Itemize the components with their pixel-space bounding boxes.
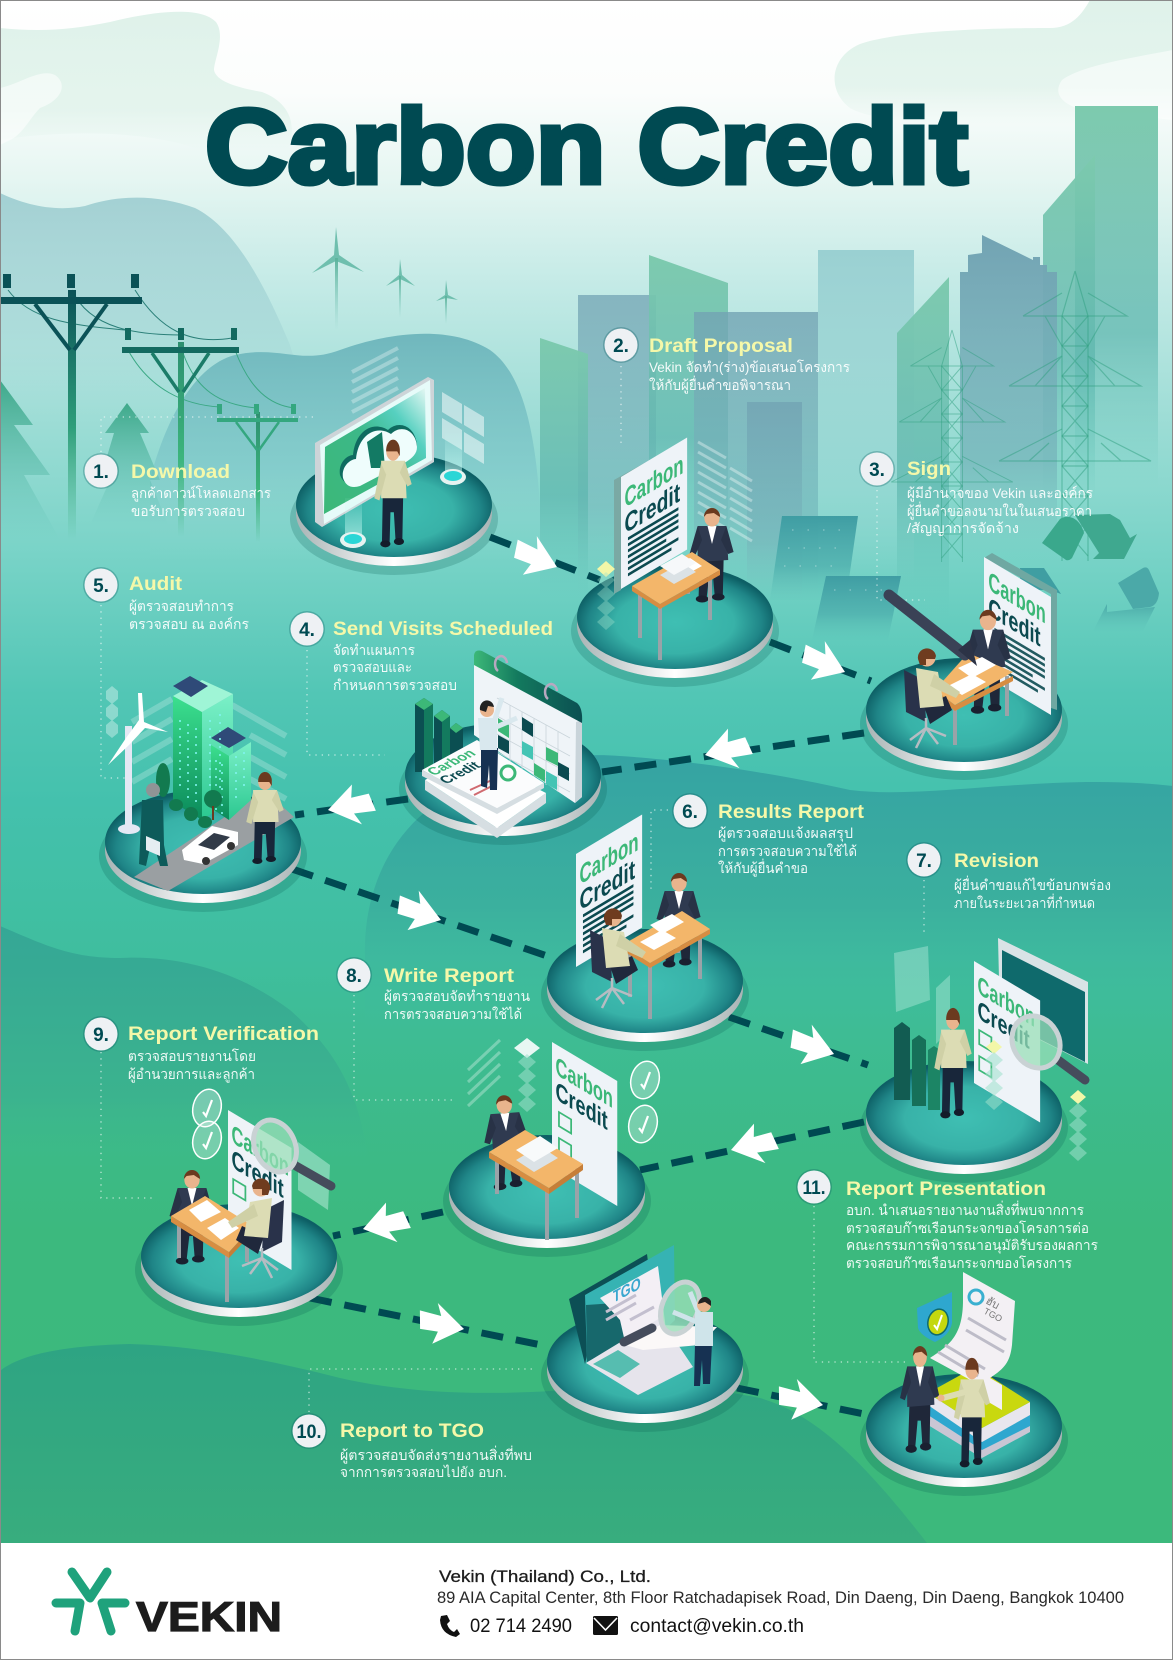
heading: Audit [129, 574, 183, 595]
badge: 8. [346, 966, 362, 987]
document: Carbon [579, 825, 639, 891]
arrow 3 to 4 [602, 725, 864, 775]
document stack [422, 740, 546, 838]
seated man [228, 1178, 284, 1278]
book stack [928, 1367, 1030, 1458]
scene 9: report verification platform [135, 1086, 343, 1326]
badge: 9. [93, 1025, 109, 1046]
document: Credit [231, 1143, 284, 1204]
heading: Report to TGO [340, 1421, 484, 1442]
icon: side sheet [298, 1142, 330, 1210]
road [134, 797, 294, 891]
document: Credit [579, 853, 635, 917]
address: 89 AIA Capital Center, 8th Floor Ratchadapisek Road, Din Daeng, Din Daeng, Bangkok 10400 [437, 1589, 1124, 1607]
badge [796, 1169, 832, 1205]
heading: Draft Proposal [649, 336, 793, 357]
heading: Write Report [384, 966, 515, 987]
dark monitor [998, 938, 1088, 1064]
laptop [569, 1245, 717, 1395]
heading: Report Verification [128, 1024, 319, 1045]
arrow 7 to 8 [640, 1120, 864, 1170]
dotted leader lines [101, 366, 925, 1412]
wave middle right [365, 755, 1173, 1030]
email: contact@vekin.co.th [630, 1616, 804, 1637]
hill small [150, 334, 542, 560]
icon: data panel [698, 442, 752, 541]
description: ให้กับผู้ยื่นคำขอพิจารณา [649, 376, 791, 394]
document: Carbon [988, 565, 1046, 630]
document [576, 814, 642, 967]
description: /สัญญาการจัดจ้าง [907, 520, 1019, 536]
description [846, 1201, 1098, 1271]
document [974, 961, 1040, 1123]
description: ผู้มีอำนาจของ Vekin และองค์กร [907, 485, 1093, 502]
translucent sheets [894, 946, 950, 1044]
solar panels background [770, 516, 901, 640]
hex columns [985, 1040, 1087, 1161]
heading: Revision [954, 851, 1039, 872]
description [129, 598, 249, 632]
description: ตรวจสอบรายงานโดย [128, 1048, 256, 1064]
inspector [139, 783, 168, 866]
description: การตรวจสอบความใช้ได้ [384, 1006, 522, 1022]
wave bottom [0, 1344, 927, 1543]
badge [289, 611, 325, 647]
badge [291, 1413, 327, 1449]
desk [622, 911, 710, 1019]
desk [935, 653, 1013, 745]
person [673, 1292, 713, 1386]
document: Carbon [977, 969, 1035, 1033]
badge [336, 957, 372, 993]
standing man [170, 1170, 214, 1264]
skyline buildings [540, 106, 1158, 620]
description [384, 988, 530, 1022]
person at desk [481, 1094, 583, 1240]
document [614, 437, 687, 594]
cloud left highlight [0, 73, 62, 145]
wind turbines [312, 227, 458, 330]
description: ภายในระยะเวลาที่กำหนด [954, 894, 1095, 911]
title: Carbon Credit [205, 88, 968, 206]
arrow 4 to 5 [295, 781, 408, 830]
car [182, 826, 238, 865]
company name: Vekin (Thailand) Co., Ltd. [439, 1567, 651, 1586]
heading: Results Report [718, 802, 865, 823]
icon: magnifier [624, 1276, 707, 1342]
scroll document: ฮับ [984, 1295, 1001, 1312]
scene 8: write report platform [443, 1038, 663, 1257]
badge [603, 327, 639, 363]
icon: diamond and hex column [597, 561, 615, 630]
arrow 10 to 11 [737, 1376, 864, 1426]
badge: 1. [93, 462, 109, 483]
cloud right [835, 0, 1173, 125]
badge [859, 451, 895, 487]
description: ผู้ตรวจสอบจัดส่งรายงานสิ่งที่พบ [340, 1446, 532, 1464]
document: Credit [555, 1075, 608, 1136]
document [228, 1110, 292, 1270]
description: ผู้ตรวจสอบจัดทำรายงาน [384, 988, 530, 1005]
icon: check circles [189, 1086, 225, 1162]
description [907, 485, 1093, 536]
description [340, 1446, 532, 1480]
description: ตรวจสอบ ณ องค์กร [129, 616, 249, 632]
scene 10: report to TGO platform [541, 1245, 749, 1432]
badge: 4. [299, 620, 315, 641]
step 7: revision [906, 842, 1111, 911]
recycle symbol [1020, 514, 1159, 633]
seated man [590, 908, 646, 1008]
standing man [656, 873, 701, 968]
badge [83, 453, 119, 489]
handshake men [900, 1346, 990, 1467]
icon: magnifier [245, 1113, 331, 1186]
scroll document [930, 1272, 1015, 1410]
person at desk [632, 508, 734, 660]
footer panel [0, 1543, 1173, 1660]
description: การตรวจสอบความใช้ได้ [718, 843, 857, 859]
icon: screen with cloud [315, 377, 434, 527]
logo wordmark: VEKIN [136, 1593, 282, 1640]
document: Carbon [231, 1118, 289, 1182]
step 11: report presentation [796, 1169, 1098, 1271]
step 9: report verification [83, 1016, 319, 1083]
hill large [0, 193, 312, 420]
badge [906, 842, 942, 878]
person [374, 440, 412, 547]
icon: phone [440, 1615, 460, 1637]
description: ให้กับผู้ยื่นคำขอ [718, 859, 808, 877]
green towers [173, 676, 251, 820]
badge: 10. [296, 1422, 322, 1443]
arrow 1 to 2 [490, 530, 600, 586]
step 2: draft proposal [603, 327, 850, 394]
laptop: TGO [613, 1274, 641, 1307]
phone number: 02 714 2490 [470, 1616, 572, 1637]
inspector two [246, 772, 284, 864]
step 1: download [83, 453, 271, 519]
pine trees [0, 380, 168, 540]
step 10: report to TGO [291, 1413, 532, 1480]
description: ผู้อำนวยการและลูกค้า [128, 1066, 255, 1083]
document [984, 553, 1057, 715]
person [478, 698, 517, 790]
scene 6: results report platform [541, 814, 749, 1051]
description: ตรวจสอบและ [333, 659, 412, 675]
badge [672, 793, 708, 829]
arrow 8 to 9 [333, 1199, 443, 1249]
document stack: Carbon [424, 747, 480, 778]
arrow 6 to 7 [729, 1017, 868, 1074]
scene 4: send visits platform [399, 650, 607, 845]
hex icons [106, 686, 118, 738]
scene 1: download platform [290, 348, 498, 575]
description: Vekin จัดทำ(ร่าง)ข้อเสนอโครงการ [649, 359, 850, 375]
trees [156, 763, 222, 828]
scene 3: sign platform [860, 553, 1068, 780]
badge: 2. [613, 336, 629, 357]
badge: 11. [802, 1178, 826, 1199]
description: อบก. นำเสนอรายงานงานสิ่งที่พบจากการ [846, 1201, 1084, 1218]
heading: Report Presentation [846, 1179, 1046, 1200]
scene 5: audit platform [99, 676, 307, 912]
man signing [964, 610, 1011, 714]
step 6: results report [672, 793, 865, 877]
transmission tower small [891, 330, 1013, 562]
bar chart [415, 698, 463, 778]
description [718, 825, 857, 877]
wind turbine [108, 693, 168, 834]
description [954, 876, 1111, 911]
document stack: Credit [436, 759, 485, 787]
transmission tower large [999, 271, 1151, 561]
document: Credit [624, 476, 680, 540]
utility poles [0, 274, 298, 542]
person [934, 1008, 972, 1118]
icon: hex and data [468, 1038, 540, 1112]
description: จัดทำแผนการ [333, 642, 415, 658]
stripes behind towers [132, 699, 286, 799]
arrow 5 to 6 [292, 869, 553, 958]
badge: 3. [869, 460, 885, 481]
scroll document: TGO [982, 1306, 1004, 1324]
desk [171, 1196, 253, 1302]
document [552, 1042, 617, 1206]
step 8: write report [336, 957, 530, 1022]
description: ผู้ยื่นคำขอลงนามในในเสนอราคา [907, 502, 1092, 520]
description: จากการตรวจสอบไปยัง อบก. [340, 1464, 507, 1480]
description: ผู้ยื่นคำขอแก้ไขข้อบกพร่อง [954, 876, 1111, 894]
description: ตรวจสอบก๊าซเรือนกระจกของโครงการ [846, 1255, 1072, 1271]
description: ขอรับการตรวจสอบ [131, 503, 245, 519]
step 4: send visits scheduled [289, 611, 553, 693]
step 5: audit [83, 567, 249, 632]
heading: Sign [907, 459, 951, 480]
description [333, 642, 457, 693]
description [649, 359, 850, 394]
calendar [474, 650, 582, 803]
document: Credit [977, 994, 1030, 1055]
scene 7: revision platform [860, 938, 1088, 1183]
badge: 7. [916, 851, 932, 872]
bar chart [894, 1022, 940, 1110]
cloud right highlight [1058, 50, 1173, 120]
badge: 5. [93, 576, 109, 597]
icon: tiles [442, 392, 484, 464]
description: ตรวจสอบก๊าซเรือนกระจกของโครงการต่อ [846, 1220, 1089, 1236]
arrow 9 to 10 [310, 1298, 546, 1350]
document: Carbon [624, 448, 684, 514]
badge [83, 567, 119, 603]
description: กำหนดการตรวจสอบ [333, 677, 457, 693]
icon: magnifier [1003, 1007, 1085, 1080]
badge: 6. [682, 802, 698, 823]
scene 2: draft proposal platform [571, 437, 779, 687]
description: คณะกรรมการพิจารณาอนุมัติรับรองผลการ [846, 1237, 1098, 1254]
icon: check circles [625, 1058, 663, 1146]
description: ผู้ตรวจสอบแจ้งผลสรุป [718, 825, 853, 842]
icon: mail [593, 1616, 618, 1635]
badge [83, 1016, 119, 1052]
wave left [0, 926, 370, 1170]
cloud left [0, 12, 292, 150]
document: Carbon [555, 1050, 613, 1114]
step 3: sign [859, 451, 1093, 536]
arrow 2 to 3 [770, 635, 871, 691]
logo mark [56, 1572, 125, 1631]
description [128, 1048, 256, 1083]
icon: data lines [352, 348, 398, 412]
document: Credit [988, 591, 1041, 653]
description: ลูกค้าดาวน์โหลดเอกสาร [131, 485, 271, 502]
seated man [904, 648, 960, 748]
description: ผู้ตรวจสอบทำการ [129, 598, 234, 615]
description [131, 485, 271, 519]
icon: shield [917, 1292, 952, 1342]
icon: glow pods [340, 433, 466, 548]
heading: Download [131, 462, 230, 483]
heading: Send Visits Scheduled [333, 619, 553, 640]
scene 11: report presentation platform [860, 1272, 1068, 1496]
icon: large pen [889, 595, 977, 666]
